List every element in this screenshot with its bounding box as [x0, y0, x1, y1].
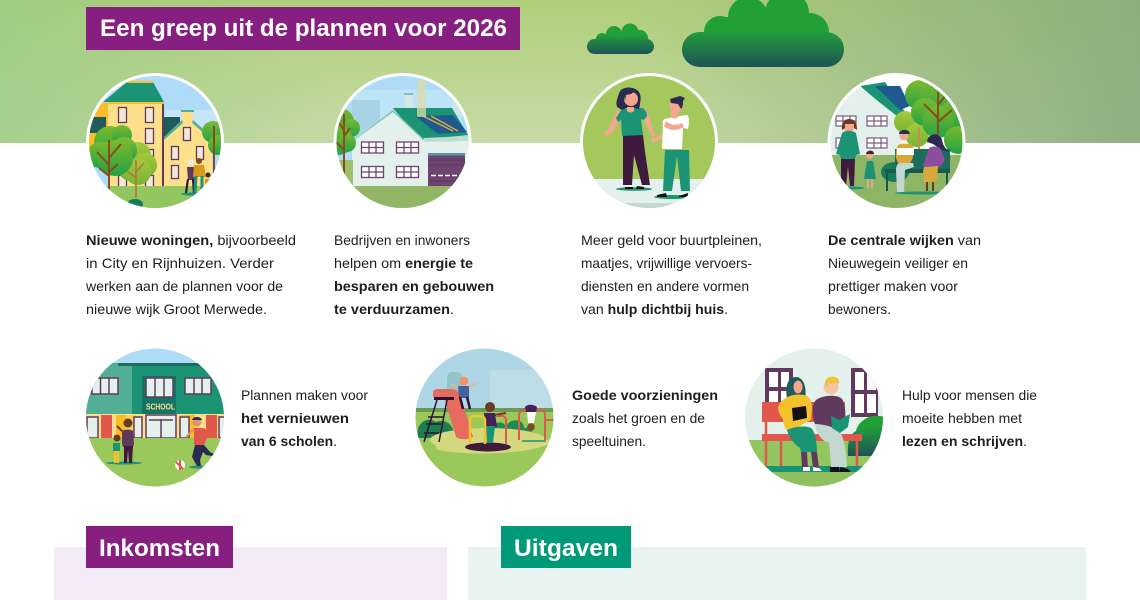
- text: literacy help: lezen en schrijven.: [902, 433, 1027, 449]
- illustration: house with solar panels: [334, 73, 472, 208]
- heading: expenses: Uitgaven: [514, 535, 618, 562]
- text: literacy help: Hulp voor mensen die: [902, 387, 1037, 403]
- text: neighbourhood care: Meer geld voor buurtpleinen,: [581, 232, 762, 248]
- text: neighbourhood care: [581, 232, 762, 317]
- green header background: [0, 0, 1140, 143]
- text: schools: [241, 387, 368, 449]
- text: central neighbourhoods: Nieuwegein veiliger en: [828, 255, 968, 271]
- text: central neighbourhoods: prettiger maken voor: [828, 278, 958, 294]
- text: energy: Bedrijven en inwoners: [334, 232, 470, 248]
- text: new homes: in City en Rijnhuizen. Verder: [86, 255, 274, 271]
- text: neighbourhood care: van hulp dichtbij huis.: [581, 301, 728, 317]
- title: Een greep uit de plannen voor 2026: [100, 15, 507, 42]
- text: schools: van 6 scholen.: [241, 433, 337, 449]
- text: new homes: werken aan de plannen voor de: [85, 278, 283, 294]
- text: schools: Plannen maken voor: [241, 387, 368, 403]
- panel: income: [54, 526, 447, 600]
- heading: income: Inkomsten: [99, 535, 220, 562]
- illustration: school: [86, 348, 226, 488]
- illustration: two people reading on a bench: [744, 348, 884, 490]
- text: facilities: Goede voorzieningen: [572, 387, 718, 403]
- text: central neighbourhoods: bewoners.: [828, 301, 891, 317]
- text: energy: te verduurzamen .: [334, 301, 454, 317]
- illustration: residents in front of a house: [827, 73, 972, 215]
- text: schools: het vernieuwen: [241, 410, 349, 426]
- illustration: school: SCHOOL: [146, 402, 175, 412]
- text: new homes: Nieuwe woningen, bijvoorbeeld: [86, 232, 296, 248]
- text: literacy help: moeite hebben met: [902, 410, 1022, 426]
- text: neighbourhood care: maatjes, vrijwillige vervoers-: [581, 255, 752, 271]
- text: energy: [334, 232, 494, 317]
- text: literacy help: [902, 387, 1037, 449]
- text: facilities: [572, 387, 718, 449]
- panel: expenses: [468, 526, 1086, 600]
- text: new homes: nieuwe wijk Groot Merwede.: [86, 301, 267, 317]
- text: facilities: zoals het groen en de: [572, 410, 705, 426]
- illustration: new homes: [86, 73, 228, 216]
- title: [86, 7, 520, 50]
- illustration: couple walking hand in hand: [580, 73, 720, 213]
- heading: income: [86, 526, 233, 568]
- text: energy: helpen om energie te: [334, 255, 473, 271]
- icon: small cloud: [587, 24, 654, 54]
- text: new homes: [85, 232, 296, 317]
- text: facilities: speeltuinen.: [572, 433, 646, 449]
- illustration: playground: [415, 348, 556, 490]
- text: energy: besparen en gebouwen: [334, 278, 494, 294]
- text: central neighbourhoods: [828, 232, 981, 317]
- text: neighbourhood care: diensten en andere vormen: [581, 278, 749, 294]
- icon: large cloud: [682, 0, 844, 67]
- text: central neighbourhoods: De centrale wijken van: [828, 232, 981, 248]
- heading: expenses: [501, 526, 631, 568]
